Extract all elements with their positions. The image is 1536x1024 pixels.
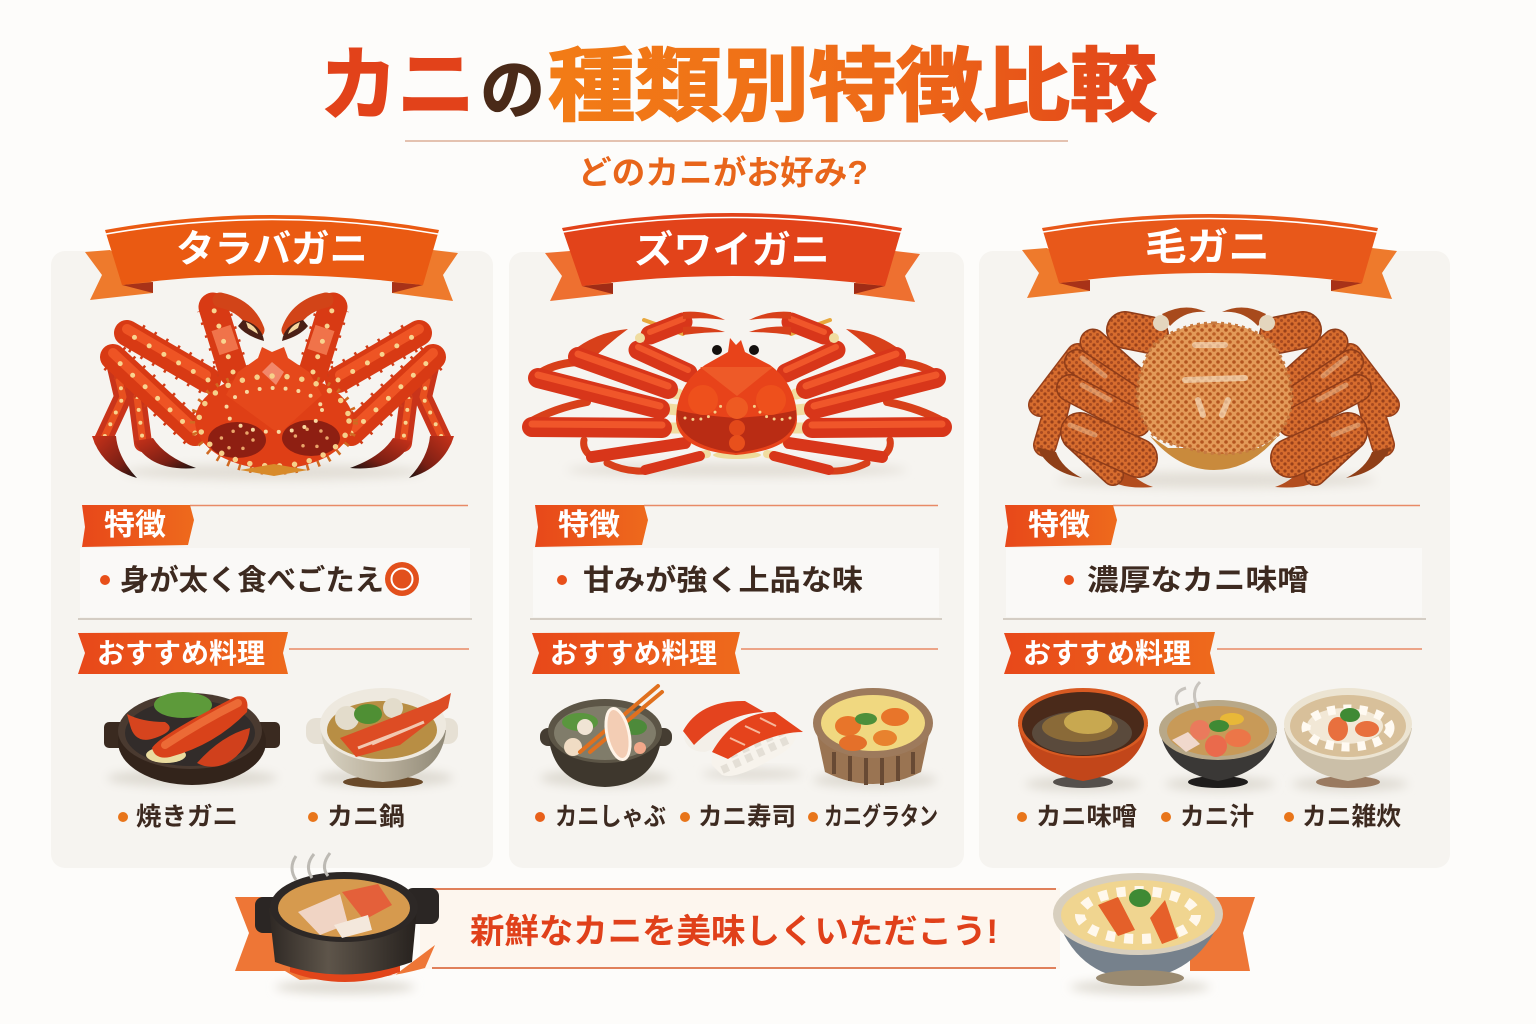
dish: カニ汁: [1159, 682, 1277, 791]
panel: ズワイガニ: [509, 213, 964, 868]
label: 特徴: 特徴: [558, 509, 620, 542]
dish label: カニ味噌: カニ味噌: [1036, 803, 1137, 831]
ribbon: 毛ガニ: [1022, 214, 1397, 299]
dish label: カニしゃぶ: カニしゃぶ: [555, 803, 666, 831]
feature text: [1006, 548, 1422, 617]
dish label: 焼きガニ: 焼きガニ: [136, 803, 238, 831]
dish: カニグラタン: [813, 688, 937, 788]
dish label: カニ寿司: カニ寿司: [698, 803, 796, 831]
dish: カニ味噌: [1018, 688, 1148, 791]
crab: ズワイガニ: [530, 312, 944, 477]
ribbon: ズワイガニ: [545, 213, 920, 302]
dish: bottom hot pot: [255, 853, 439, 994]
crab: タラバガニ: [92, 300, 454, 480]
title: 種類別特徴比較: [548, 42, 1157, 131]
label: おすすめ料理: [532, 632, 938, 674]
dish: カニ鍋: [306, 688, 458, 788]
feature text: 身が太く食べごたえ: [120, 563, 384, 597]
title: の: [480, 53, 545, 127]
dish: 焼きガニ: [104, 692, 280, 787]
dish: カニ雑炊: [1284, 688, 1412, 791]
bottom banner: [235, 888, 1255, 971]
banner message: 新鮮なカニを美味しくいただこう!: [470, 913, 998, 951]
label: おすすめ料理: おすすめ料理: [1023, 638, 1191, 669]
dish label: カニ雑炊: カニ雑炊: [1302, 803, 1401, 831]
feature text: [80, 548, 470, 617]
label: おすすめ料理: [78, 632, 469, 674]
feature text: 甘みが強く上品な味: [583, 563, 863, 597]
dish label: カニグラタン: [808, 802, 938, 831]
dish label: カニグラタン: カニグラタン: [824, 802, 938, 831]
label: 特徴: [82, 505, 468, 547]
label: 特徴: 特徴: [1028, 509, 1090, 542]
panel: タラバガニ: [51, 215, 493, 868]
label: おすすめ料理: おすすめ料理: [550, 638, 717, 669]
title: [320, 41, 1157, 131]
dish: カニしゃぶ: [540, 686, 672, 787]
title: カニ: [320, 41, 475, 130]
label: 特徴: 特徴: [104, 509, 166, 542]
label: おすすめ料理: おすすめ料理: [97, 638, 265, 669]
crab: 毛ガニ: [1037, 307, 1391, 488]
label: 特徴: [1005, 505, 1420, 547]
dish label: カニ鍋: カニ鍋: [327, 803, 405, 831]
label: おすすめ料理: [1004, 632, 1422, 674]
feature text: 濃厚なカニ味噌: [1087, 564, 1309, 597]
ribbon: タラバガニ: タラバガニ: [176, 229, 368, 271]
feature text: [533, 548, 939, 617]
dish label: カニ汁: カニ汁: [1180, 803, 1254, 831]
dish: カニ寿司: [683, 701, 803, 779]
ribbon: 毛ガニ: 毛ガニ: [1145, 227, 1270, 269]
dish: bottom zosui bowl: [1053, 873, 1223, 994]
ribbon: ズワイガニ: ズワイガニ: [634, 229, 830, 272]
panel: 毛ガニ: [979, 214, 1450, 868]
subtitle: どのカニがお好み?: [578, 154, 868, 191]
label: 特徴: [535, 505, 938, 547]
icon: double circle: [385, 562, 419, 596]
ribbon: タラバガニ: [85, 215, 458, 301]
